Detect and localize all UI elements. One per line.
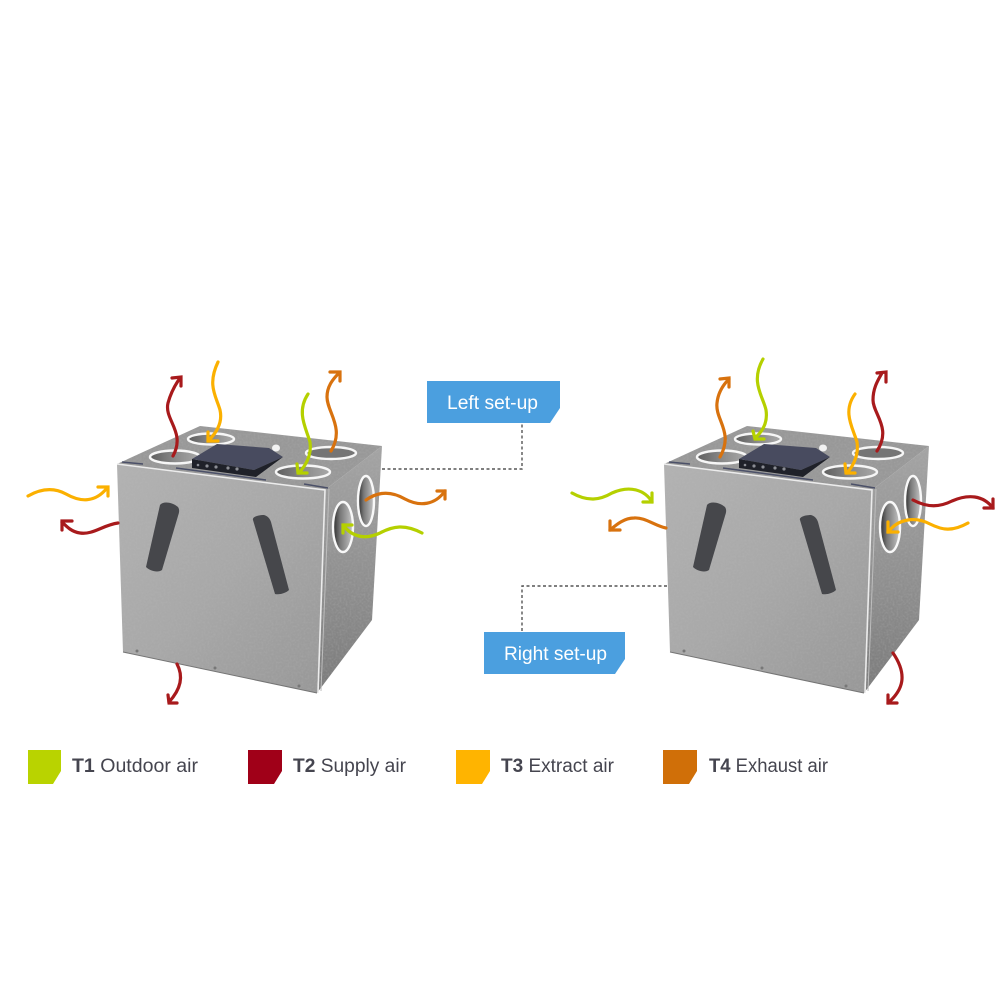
legend item: T1 outdoor air	[28, 750, 199, 784]
legend item: T1 outdoor air: T1 Outdoor air	[72, 756, 199, 777]
connector: right set-up	[522, 586, 667, 632]
legend item: T3 extract air	[456, 750, 615, 784]
label: left set-up: Left set-up	[447, 393, 538, 414]
legend item: T3 extract air: T3 Extract air	[501, 756, 615, 777]
device: left set-up unit	[117, 426, 382, 693]
arrows: right unit air flows	[572, 359, 993, 703]
arrows: left unit air flows	[28, 362, 445, 703]
legend	[28, 750, 829, 784]
label: right set-up	[484, 632, 625, 674]
connector: left set-up	[382, 423, 522, 469]
label: right set-up: Right set-up	[504, 644, 607, 665]
legend item: T2 supply air: T2 Supply air	[293, 756, 407, 777]
legend item: T2 supply air	[248, 750, 407, 784]
device: right set-up unit	[664, 426, 929, 693]
legend item: T4 exhaust air	[663, 750, 829, 784]
label: left set-up	[427, 381, 560, 423]
legend item: T4 exhaust air: T4 Exhaust air	[709, 756, 829, 777]
